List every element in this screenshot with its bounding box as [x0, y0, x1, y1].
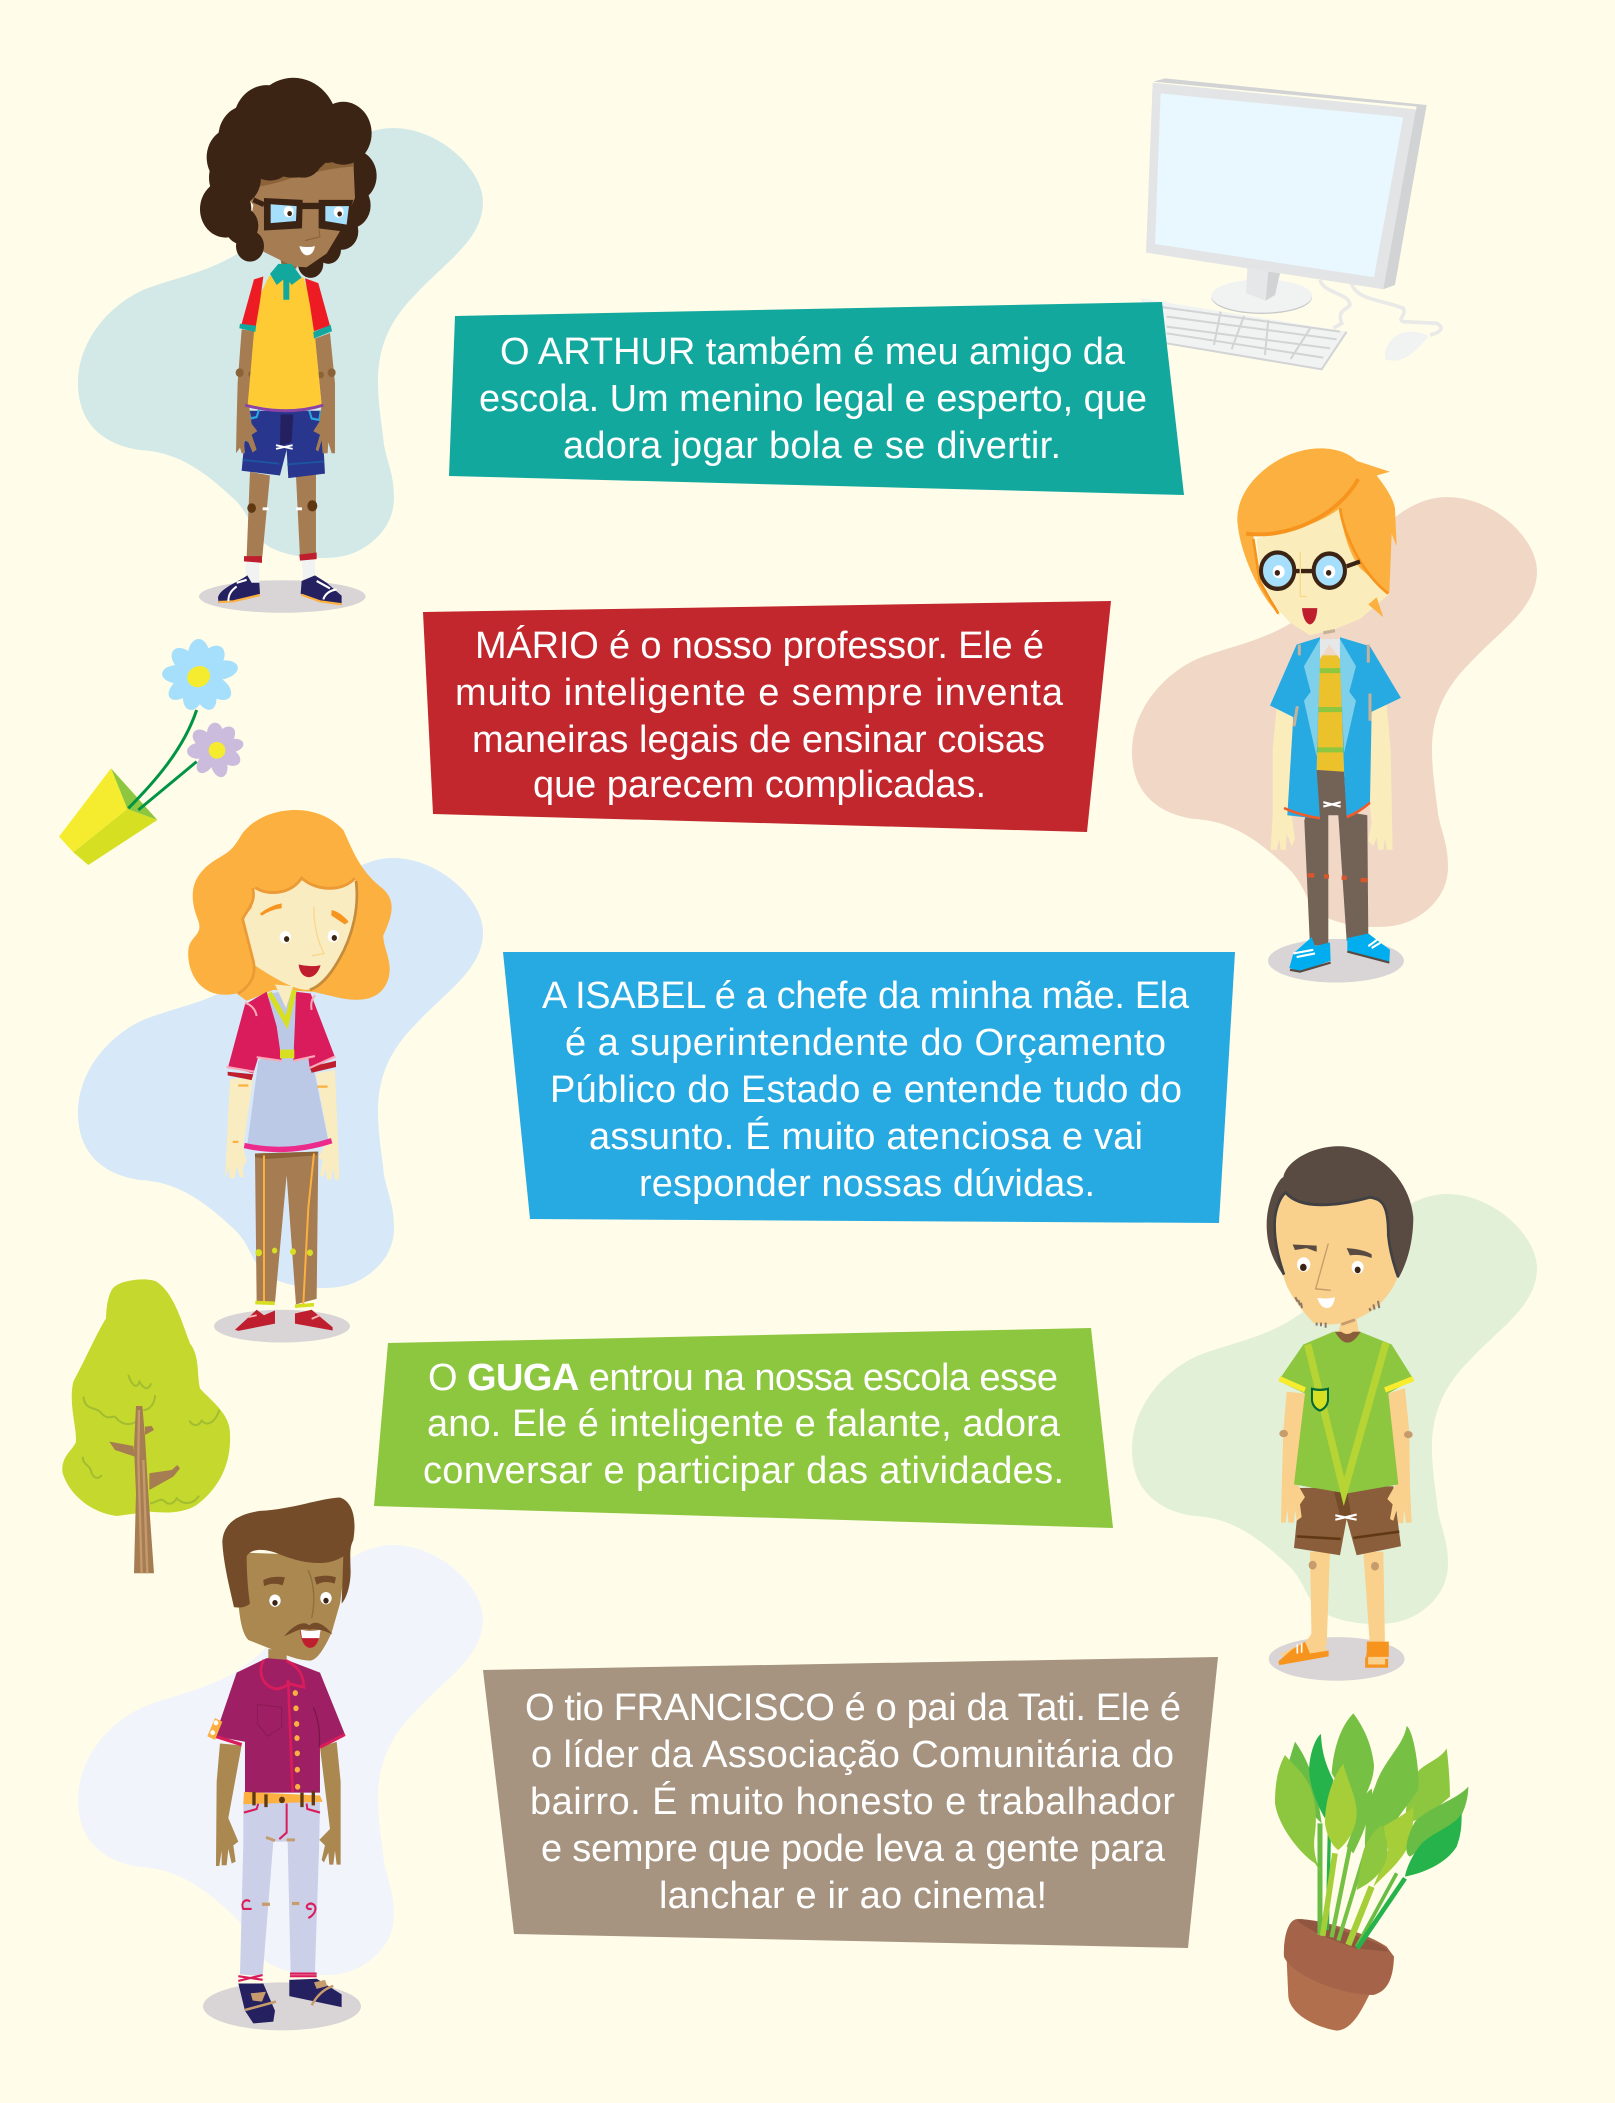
- text box: Francisco: e sempre que pode leva a gente para: [541, 1828, 1166, 1870]
- character: Guga: [1132, 1146, 1537, 1681]
- text box: Francisco: O tio FRANCISCO é o pai da Tati. Ele é: [525, 1687, 1181, 1729]
- text box: Arthur: [449, 302, 1184, 495]
- icon: tree: [62, 1279, 230, 1573]
- text box: Francisco: bairro. É muito honesto e trabalhador: [530, 1780, 1175, 1823]
- character: Arthur: [78, 78, 483, 613]
- icon: potted plant: [1275, 1713, 1468, 2031]
- text box: Francisco: lanchar e ir ao cinema!: [659, 1875, 1047, 1917]
- text box: Mário: [423, 601, 1111, 832]
- text box: Isabel: é a superintendente do Orçamento: [565, 1022, 1166, 1064]
- text box: Guga: [374, 1328, 1113, 1528]
- text box: Mário: muito inteligente e sempre inventa: [455, 672, 1064, 714]
- text box: Arthur: escola. Um menino legal e esperto, que: [479, 378, 1147, 420]
- text box: Guga: O GUGA entrou na nossa escola esse: [428, 1357, 1058, 1399]
- text box: Mário: que parecem complicadas.: [533, 764, 986, 806]
- character: Francisco: [78, 1497, 483, 2030]
- text box: Isabel: A ISABEL é a chefe da minha mãe. Ela: [542, 975, 1190, 1017]
- text box: Isabel: Público do Estado e entende tudo do: [550, 1069, 1182, 1111]
- text box: Mário: MÁRIO é o nosso professor. Ele é: [475, 624, 1044, 667]
- text box: Isabel: responder nossas dúvidas.: [639, 1163, 1095, 1205]
- text box: Guga: conversar e participar das atividades.: [423, 1450, 1064, 1492]
- text box: Mário: maneiras legais de ensinar coisas: [472, 719, 1045, 761]
- character: Mário: [1132, 448, 1537, 983]
- text box: Isabel: [503, 952, 1235, 1223]
- text box: Guga: ano. Ele é inteligente e falante, adora: [427, 1403, 1061, 1445]
- text box: Francisco: [483, 1657, 1218, 1948]
- text box: Isabel: assunto. É muito atenciosa e vai: [589, 1115, 1143, 1158]
- character: Isabel: [78, 810, 483, 1343]
- text box: Arthur: adora jogar bola e se divertir.: [563, 425, 1061, 467]
- icon: computer: [1140, 78, 1441, 369]
- icon: flowers in a yellow vase: [59, 639, 245, 865]
- text box: Francisco: o líder da Associação Comunitária do: [531, 1734, 1174, 1776]
- text box: Arthur: O ARTHUR também é meu amigo da: [500, 331, 1126, 373]
